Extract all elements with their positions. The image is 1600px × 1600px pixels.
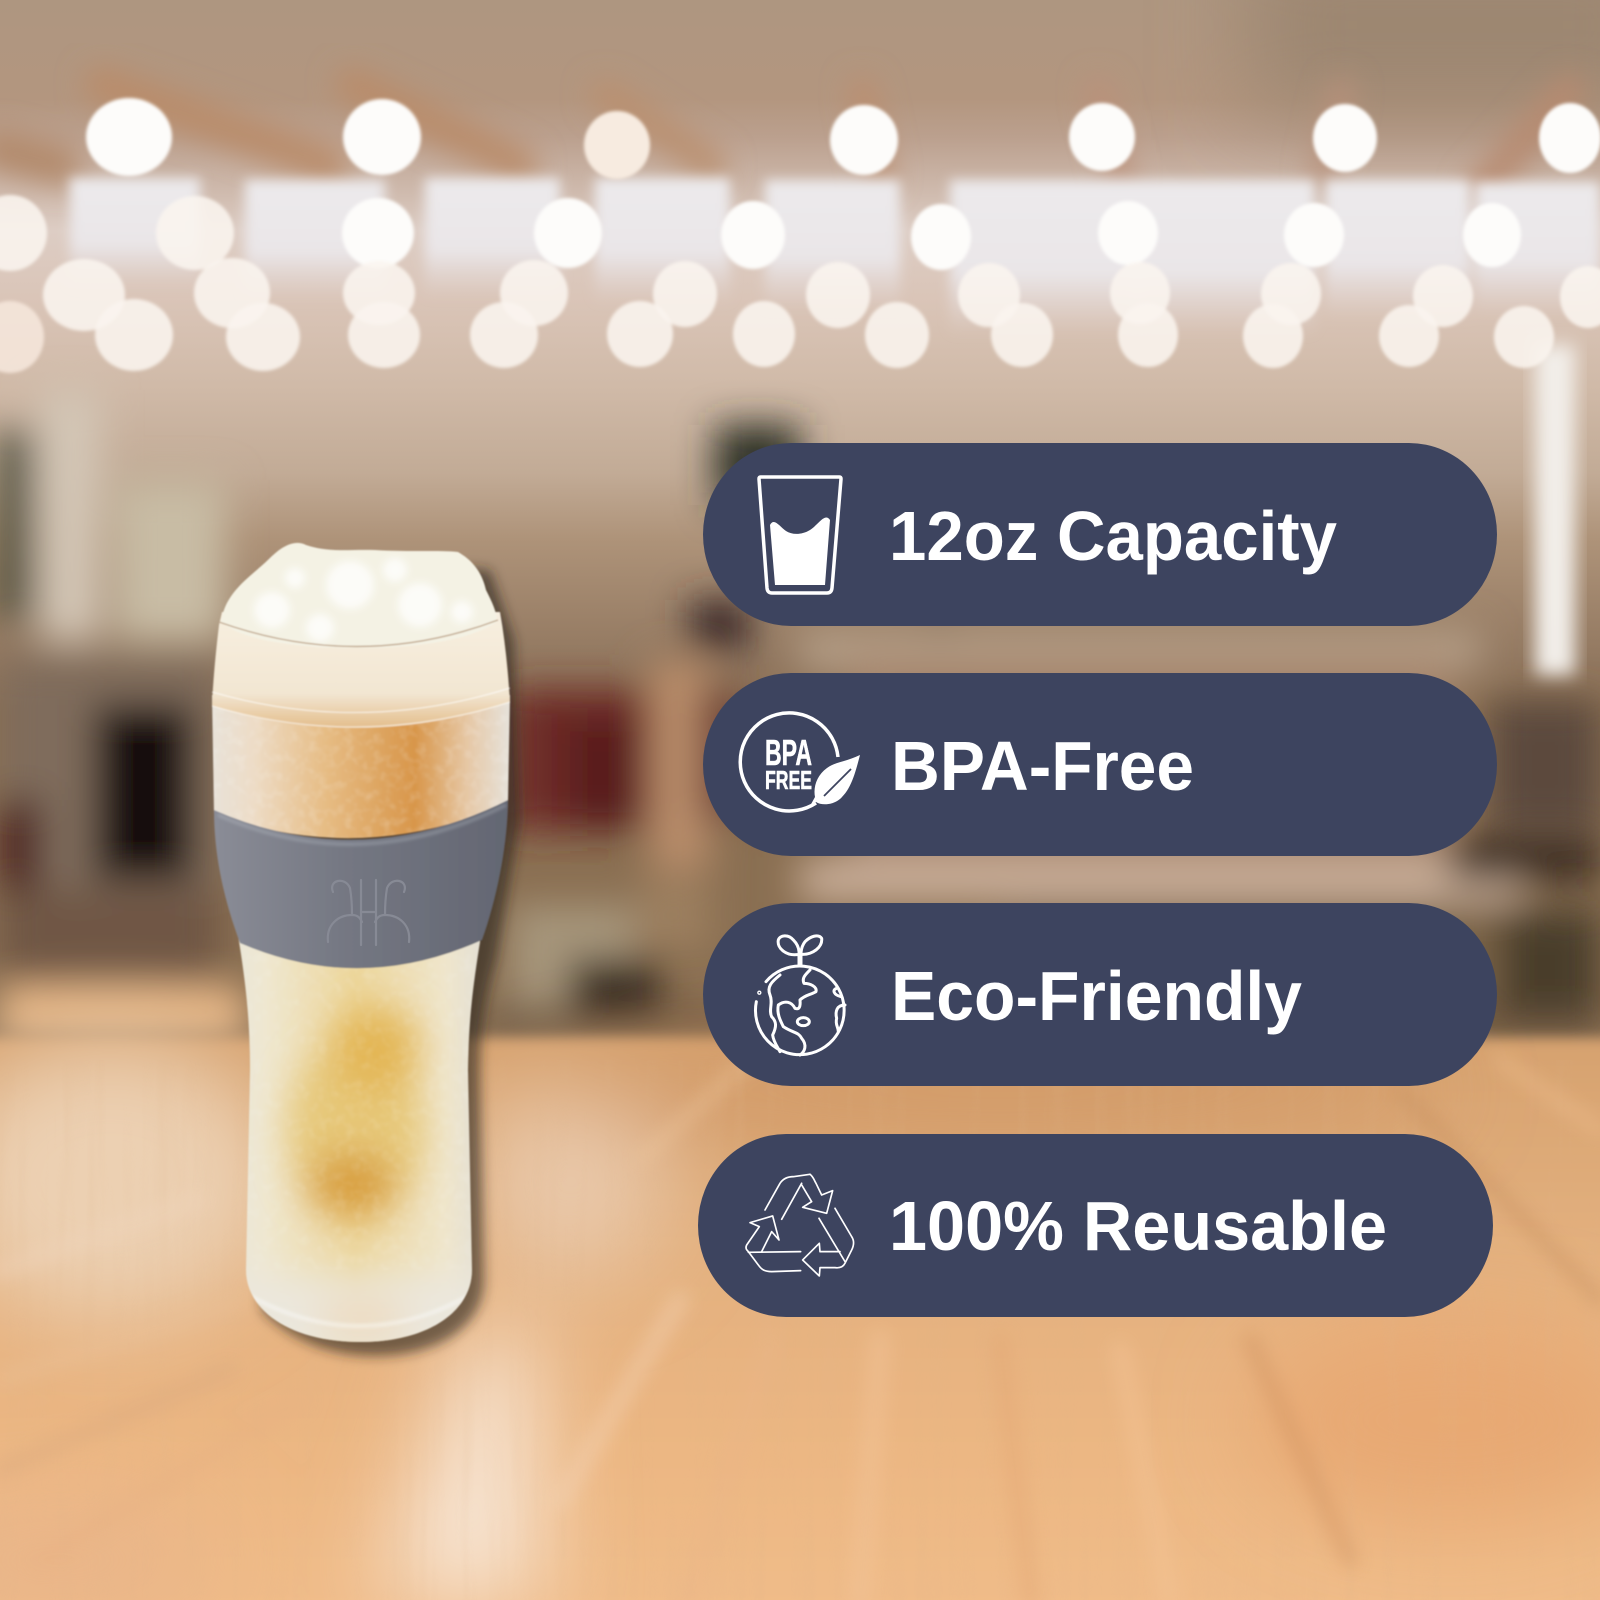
pill background xyxy=(703,443,1497,626)
ceiling beams xyxy=(0,85,1570,190)
frosted lower glass xyxy=(238,940,481,1343)
panel: 100% Reusable xyxy=(698,1134,1493,1317)
pill background xyxy=(703,903,1497,1086)
label: 100% Reusable: 100% Reusable xyxy=(889,1187,1387,1265)
wall and furniture blur xyxy=(0,390,1600,1038)
glass rim edge xyxy=(219,620,498,647)
icon: BPA free badge with leaf: BPA xyxy=(765,732,812,773)
icon: BPA free badge with leaf: FREE xyxy=(765,765,812,795)
wood grain streaks xyxy=(0,1050,1600,1600)
pill background xyxy=(703,673,1497,856)
panel: Eco-Friendly xyxy=(703,903,1497,1086)
beer glass photo xyxy=(212,543,520,1365)
foam bubbles xyxy=(254,558,473,642)
grey silicone band xyxy=(214,800,508,968)
upper liquid with dew xyxy=(211,694,511,840)
label: 12oz Capacity: 12oz Capacity xyxy=(889,497,1337,575)
label: Eco-Friendly: Eco-Friendly xyxy=(891,957,1302,1035)
embossed logo on band xyxy=(328,880,409,945)
icon: glass of water xyxy=(759,477,841,593)
foam collar and rim xyxy=(212,612,510,728)
glass drop shadow xyxy=(230,560,520,1356)
panel: 12oz Capacity xyxy=(703,443,1497,626)
icon: recycling arrows xyxy=(746,1174,854,1276)
white ceiling band xyxy=(70,178,1600,335)
rim lines xyxy=(212,688,510,727)
band dew edge xyxy=(218,805,506,844)
table surface shading xyxy=(0,1040,1600,1600)
icon: globe with sprout xyxy=(755,936,845,1055)
bokeh lights xyxy=(0,98,1600,373)
icon: BPA free badge with leaf xyxy=(740,713,860,811)
panel: BPA-Free xyxy=(703,673,1497,856)
label: BPA-Free: BPA-Free xyxy=(891,727,1194,805)
pill background xyxy=(698,1134,1493,1317)
wood grain texture xyxy=(0,1060,1600,1600)
top right ceiling shade xyxy=(1250,0,1600,110)
foam head xyxy=(221,543,497,648)
